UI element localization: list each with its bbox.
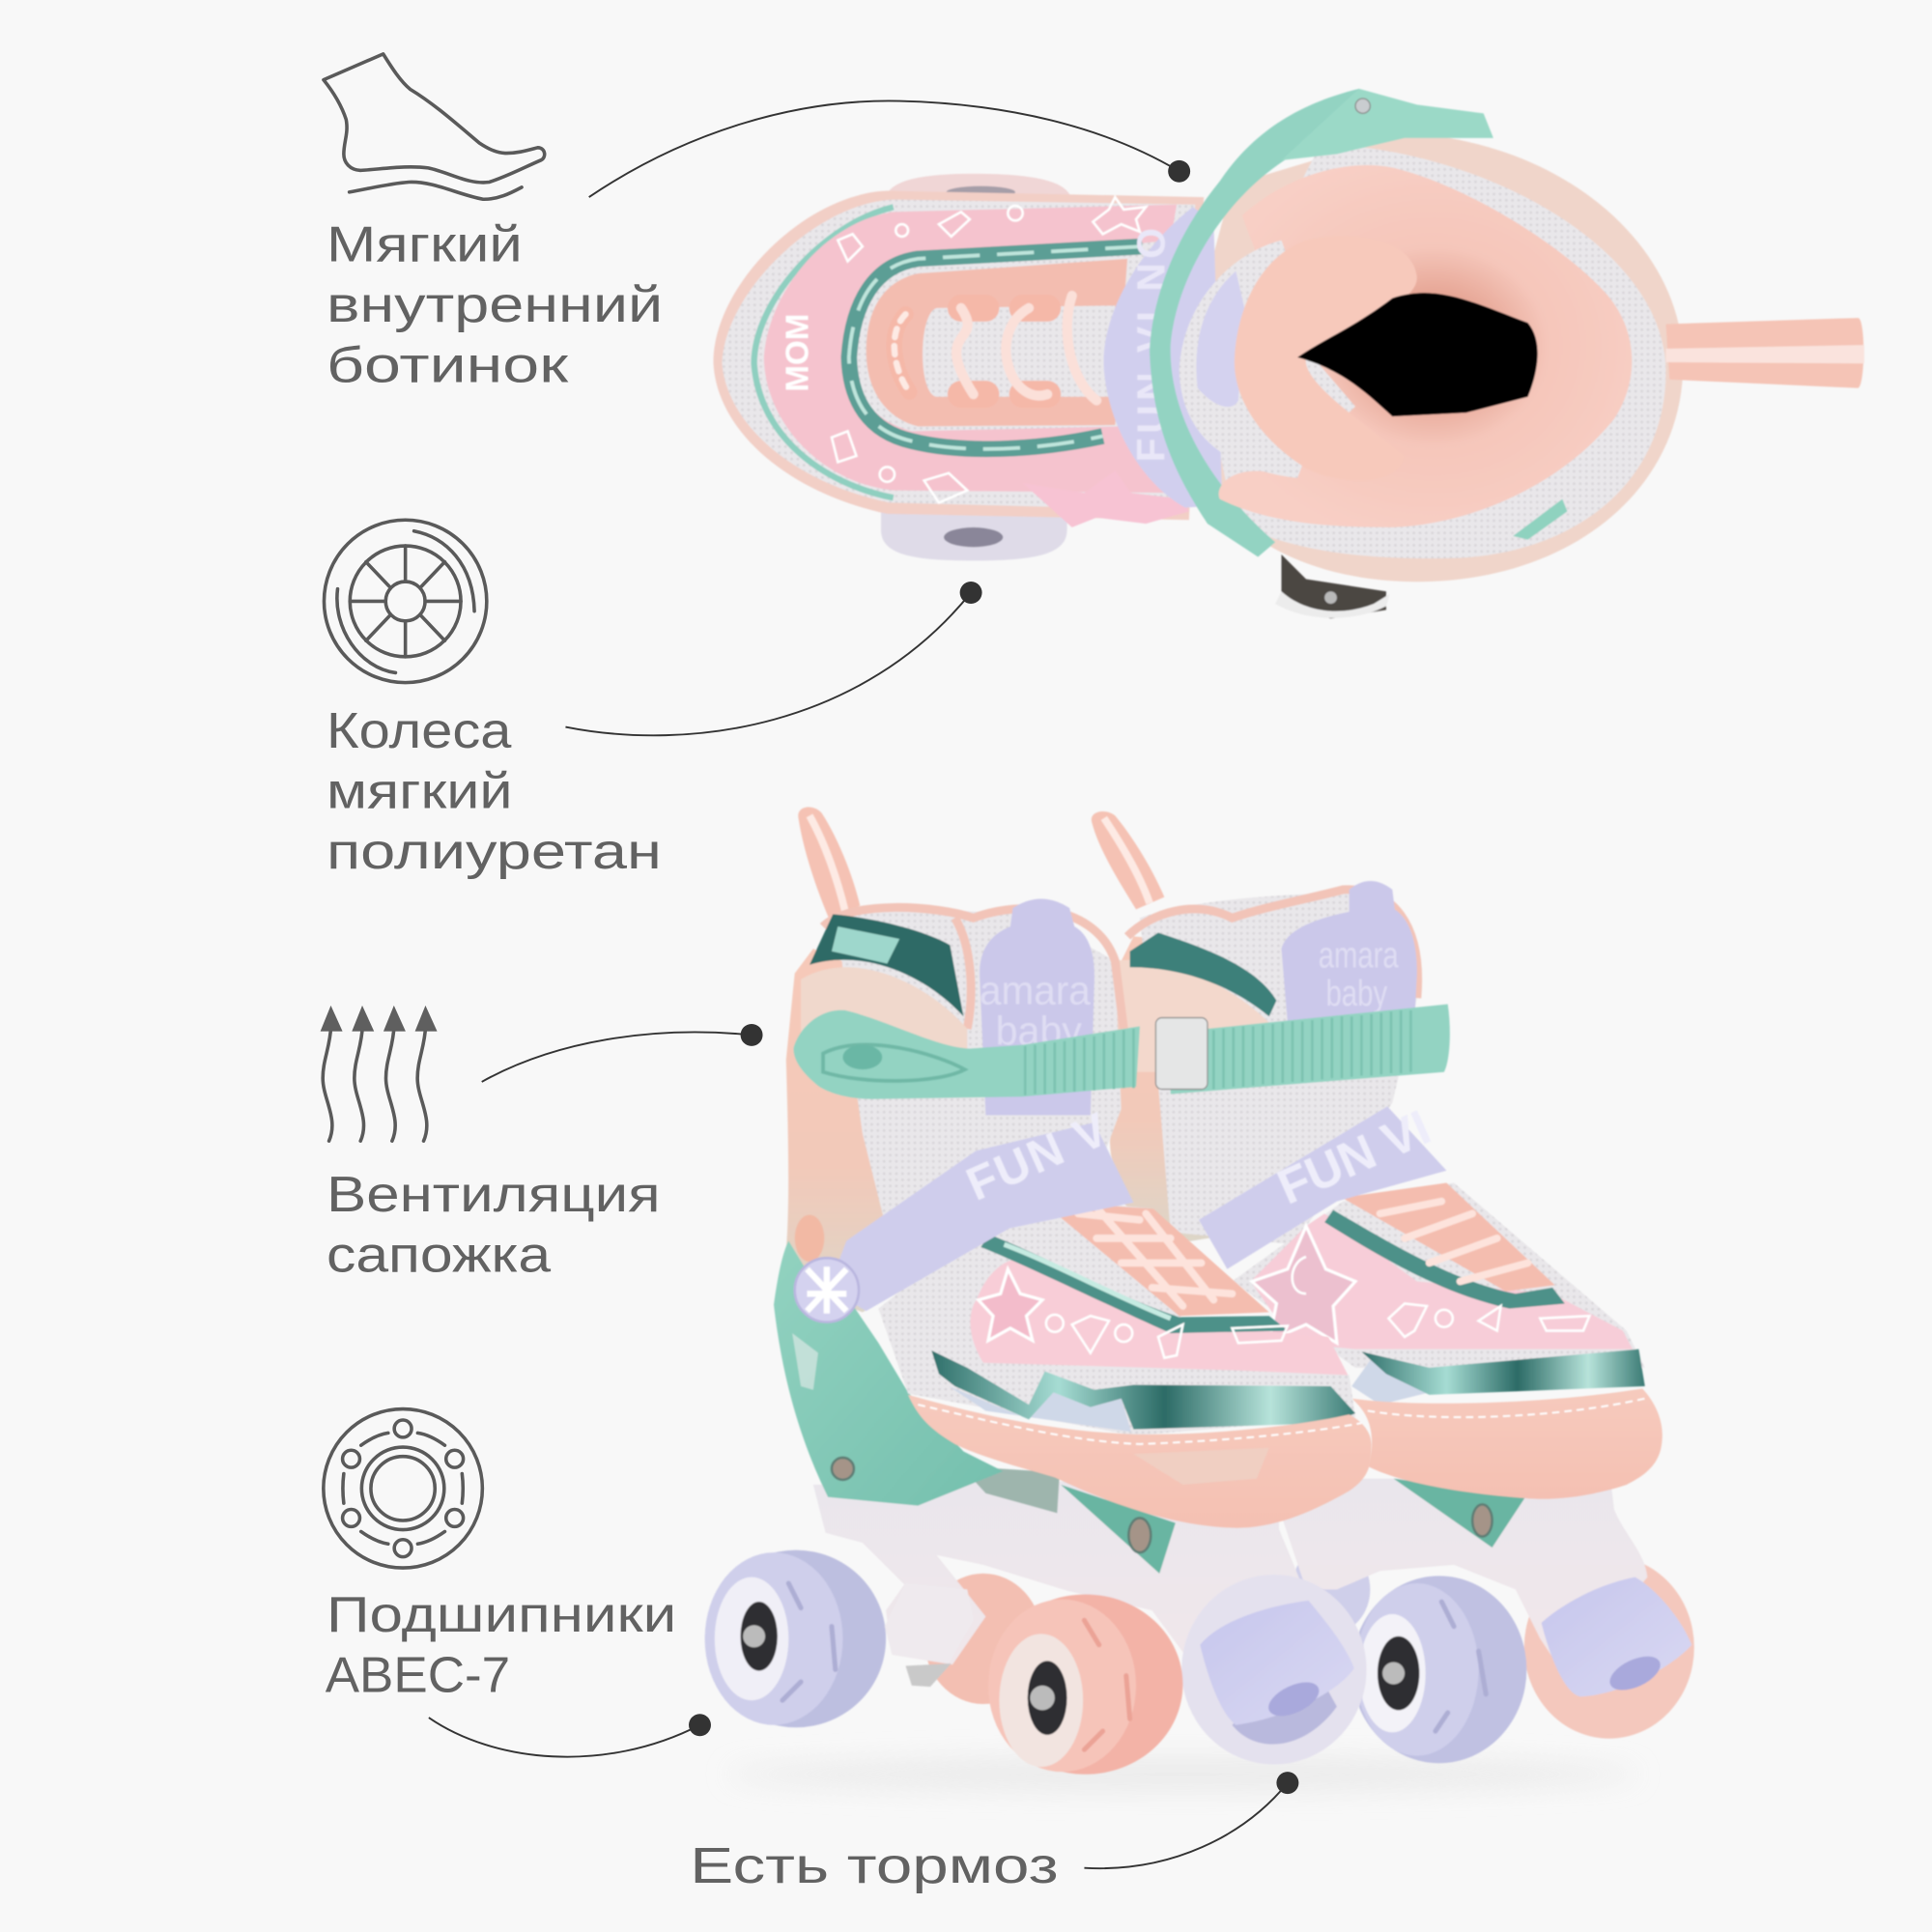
sole stitching [1368, 1399, 1645, 1417]
pink overlay [1251, 1213, 1633, 1350]
left wheel hub [741, 1602, 778, 1671]
teal bracket [1394, 1479, 1525, 1548]
peach wheel slots [1084, 1620, 1130, 1749]
tongue lilac [980, 898, 1094, 1115]
callout: brake [1084, 1772, 1298, 1868]
left wheel slots [782, 1583, 836, 1700]
brake rivet [1324, 591, 1337, 604]
text: has a brake: Есть тормоз [690, 1838, 1059, 1894]
shell teal peek [1513, 499, 1567, 540]
text: soft inner boot: Мягкий [327, 216, 523, 272]
back lilac wheel [1292, 1545, 1370, 1634]
laces [1078, 1208, 1233, 1306]
strap lettering: FUN VI NO [1128, 228, 1173, 462]
chrome panel [1130, 933, 1276, 1016]
callout: wheels [565, 582, 982, 735]
pull tab [1665, 318, 1863, 388]
shadow under skates [727, 1757, 1638, 1792]
badge emblem [807, 1266, 846, 1314]
inner collar [1219, 165, 1632, 527]
white strap buckle [1155, 1018, 1208, 1090]
chrome stripe upper [1324, 1210, 1565, 1309]
cylinder end [1605, 1650, 1665, 1697]
heel shell [782, 949, 985, 1312]
photo: right roller skate [1092, 811, 1694, 1763]
teal clasp [1282, 89, 1493, 160]
text: wheels soft polyurethane: мягкий [327, 764, 513, 820]
toe lilac infill [1351, 1355, 1430, 1405]
text: boot ventilation: Вентиляция [327, 1167, 661, 1223]
MOM mark: MOM [781, 314, 816, 392]
callout: ventilation [482, 1024, 763, 1082]
front right wheel translucent ring [1181, 1575, 1367, 1765]
top wheel hub [947, 186, 1015, 198]
icon: ventilation arrows [321, 1006, 438, 1141]
teal strap [793, 1010, 1140, 1099]
pink overlay [970, 1259, 1348, 1375]
laces [1380, 1202, 1528, 1282]
rear lilac cylinder [1542, 1577, 1691, 1696]
shell over chrome [801, 967, 967, 1060]
left wheel hole [715, 1577, 788, 1700]
left wheel band [705, 1552, 842, 1725]
pink overlay [764, 205, 1177, 493]
cuff mesh [1202, 144, 1665, 558]
strap round badge [795, 1258, 859, 1322]
buckle oval [842, 1045, 882, 1069]
FUN lettering: FUN V [959, 1103, 1116, 1211]
bottom wheel [881, 493, 1067, 560]
peach front wheel [988, 1595, 1182, 1775]
brake lower white [1275, 591, 1390, 618]
text: ABEC-7 bearings: Подшипники [327, 1587, 676, 1643]
toe outer shell [714, 190, 1204, 520]
doodles [1046, 1315, 1288, 1358]
lace block [1041, 1202, 1269, 1316]
teal strap [1171, 1005, 1450, 1094]
text: ABEC-7 bearings: ABEC-7 [326, 1647, 510, 1703]
toe mesh [722, 200, 1195, 510]
rear peach wheel [1524, 1556, 1694, 1739]
lace area [867, 259, 1127, 426]
teal edge trim [754, 207, 894, 497]
left lilac wheel [706, 1550, 886, 1727]
laces [895, 296, 1096, 401]
peach wheel band [988, 1600, 1136, 1772]
text: soft inner boot: ботинок [327, 337, 569, 393]
pull loop [798, 808, 860, 920]
right wheel inner band [1355, 1583, 1479, 1756]
text: boot ventilation [327, 1167, 661, 1283]
chassis rivet [832, 1458, 854, 1480]
teal heel chassis [774, 1240, 1003, 1506]
rear peach wheel [924, 1574, 1042, 1704]
chrome stripe lower [1361, 1350, 1645, 1395]
tongue lilac tab [1196, 271, 1244, 407]
left axle nut [743, 1625, 765, 1647]
lilac strap [1104, 207, 1222, 508]
text: ABEC-7 bearings [326, 1587, 676, 1703]
wheel hub [1378, 1636, 1419, 1710]
strap ribs [1213, 1010, 1410, 1090]
white chassis [813, 1479, 1324, 1719]
doodles on overlay [832, 197, 1146, 502]
top wheel [885, 174, 1072, 215]
bracket rivet [1472, 1504, 1492, 1537]
peach wheel translucent face [999, 1634, 1083, 1767]
teal collar arc [1150, 89, 1399, 557]
peach axle nut [1030, 1686, 1055, 1710]
bracket rivet [1128, 1518, 1151, 1552]
text: soft inner boot [327, 216, 663, 393]
sole stitching [918, 1405, 1361, 1444]
photo: top view of skate [714, 89, 1864, 618]
right wheel ring [1351, 1576, 1526, 1763]
chrome panel [810, 914, 963, 1016]
collar piping [823, 907, 1123, 1029]
boot opening [1297, 293, 1538, 416]
chrome stripe upper [980, 1235, 1288, 1333]
star patch [1252, 1226, 1355, 1343]
photo: left roller skate [705, 808, 1372, 1775]
text: wheels soft polyurethane: Колеса [327, 703, 512, 759]
grey middle plate [961, 1466, 1060, 1513]
lace block [1342, 1182, 1555, 1292]
pull loop stripe [1104, 818, 1150, 903]
icon: wheel [324, 520, 487, 683]
teal bracket [1061, 1485, 1176, 1574]
peach side button [795, 1215, 824, 1262]
chrome horseshoe [849, 246, 1142, 449]
pull tab stripe [1665, 345, 1864, 363]
tongue lettering [980, 968, 1091, 1054]
sole [1351, 1389, 1662, 1499]
tongue lettering: amara [980, 968, 1091, 1013]
icon: foot on soft insole [324, 54, 545, 199]
axle nut [1382, 1662, 1405, 1685]
callout: bearings [429, 1714, 711, 1757]
strap ribs [1025, 1029, 1133, 1095]
chassis vent [792, 1333, 818, 1390]
callout: soft inner boot [589, 100, 1190, 197]
collar piping [1127, 890, 1418, 998]
pink star [979, 1269, 1042, 1341]
front right wheel lilac lower [1233, 1651, 1337, 1745]
FUN lettering: FUN VI [1269, 1099, 1438, 1214]
text: wheels soft polyurethane: полиуретан [327, 824, 662, 880]
heel shell [1109, 936, 1306, 1244]
white chassis [1269, 1479, 1647, 1676]
right wheel slots [1435, 1602, 1486, 1731]
brake bracket [1282, 554, 1386, 618]
icon: bearing [324, 1409, 482, 1568]
photo: right roller skate: baby [1325, 973, 1388, 1014]
lace mesh [923, 305, 1115, 397]
lilac velcro strap [1199, 1106, 1446, 1269]
wheel hole [1359, 1614, 1426, 1732]
tongue peach [1235, 236, 1417, 481]
brake tip [906, 1663, 952, 1687]
pull loop stripe [810, 815, 845, 912]
text: soft inner boot: внутренний [327, 277, 663, 333]
bottom wheel hub [944, 527, 1003, 547]
cuff outer shell [1182, 133, 1683, 582]
text: wheels soft polyurethane [327, 703, 662, 880]
cylinder end [1264, 1675, 1324, 1723]
tongue lettering: baby [996, 1009, 1082, 1054]
front right lilac cylinder [1200, 1601, 1354, 1725]
lilac infill [949, 1386, 1131, 1432]
sole [908, 1395, 1372, 1528]
chrome zigzag [931, 1350, 1355, 1430]
peach wheel hub [1028, 1661, 1067, 1735]
chrome highlight [832, 926, 899, 963]
shell over chrome [1115, 960, 1269, 1072]
upper mesh [838, 909, 1122, 1282]
tongue rim [1179, 241, 1324, 478]
toe mesh [1233, 1182, 1645, 1368]
buckle ridges [823, 1044, 965, 1081]
sole moulded detail [1133, 1448, 1269, 1485]
upper mesh [1140, 894, 1417, 1244]
clasp rivet [1355, 99, 1370, 113]
lilac velcro strap [828, 1122, 1133, 1311]
stem [885, 1583, 974, 1663]
text: boot ventilation: сапожка [327, 1227, 552, 1283]
tongue lilac [1282, 881, 1417, 1023]
pull loop [1092, 811, 1164, 909]
doodles [1293, 1257, 1589, 1337]
toe mesh [878, 1198, 1355, 1435]
tongue lettering: amara [1319, 934, 1399, 976]
translucent star patch [1023, 470, 1189, 527]
